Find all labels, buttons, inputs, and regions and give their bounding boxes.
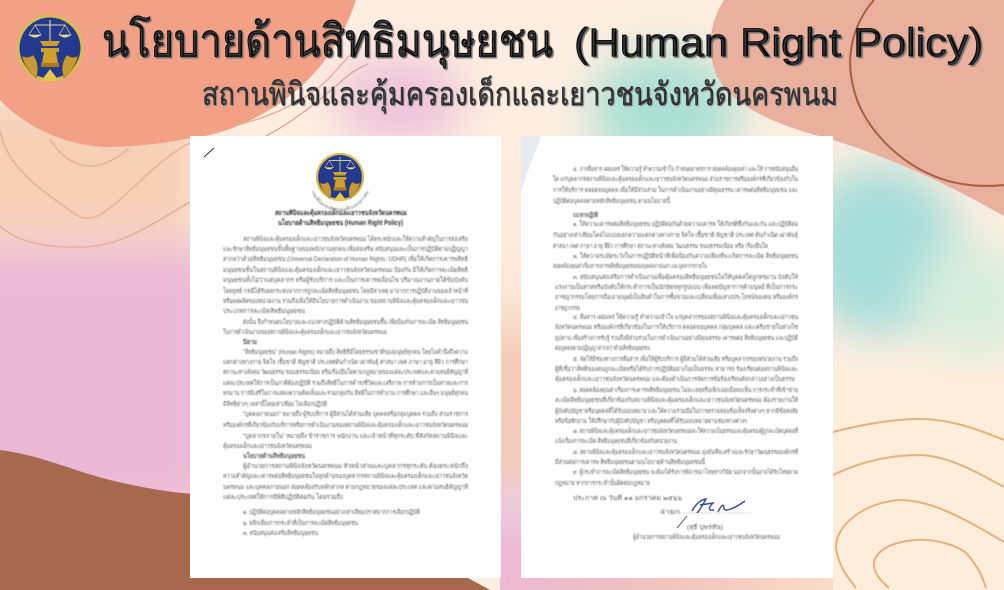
document body text: แต่ละประเทศให้การมีพิธีปฏิบัติต่อกัน โดยรวมถึง: [223, 493, 343, 501]
document body text: (สุธี บุพรหัน): [687, 523, 723, 531]
document body text: แต่ละประเทศให้การเป็นภาคีต้องปฏิบัติ รวมถึงสิทธิในการดำรงชีวิตและเสรีภาพ การห้ามการเป็นทาสและการ: [223, 378, 468, 387]
document body text: ดังนั้น จึงกำหนดนโยบายและแนวทางปฏิบัติด้านสิทธิมนุษยชนขึ้น เพื่อป้องกันการละเมิด สิทธิมนุษยชน: [243, 317, 469, 326]
document body text: ๕. จัดให้มีช่องทางการสื่อสาร เพื่อให้ผู้รับบริการ ผู้มีส่วนได้ส่วนเสีย หรือบุคลากรของหน่วยงาน รวมถึง: [573, 354, 798, 363]
document body text: ๑. ปฏิบัติต่อบุคคลตามหลักสิทธิมนุษยชนอย่างเท่าเทียมปราศจากการเลือกปฏิบัติ: [243, 508, 420, 516]
document body text: นครพนม และบุคคลภายนอก สอดคล้องกับหลักสากล ตามกฎหมายของแต่ละประเทศ และตามสนธิสัญญาที่: [223, 482, 468, 491]
document body text: ๗. สถานพินิจและคุ้มครองเด็กและเยาวชนจังหวัดนครพนมจะให้ความเป็นธรรมและคุ้มครองผู้ถูกละเมิดบุคคลที่: [573, 426, 798, 435]
document body text: หรือผลผลิตของหน่วยงาน รวมถึงเพื่อให้มีนโยบายการดำเนินงาน ของสถานพินิจและคุ้มครองเด็กและเยาวชน: [223, 296, 469, 305]
document body text: แตกต่างทางกาย จิตใจ เชื้อชาติ สัญชาติ ประเทศต้นกำเนิด เผ่าพันธุ์ ศาสนา เพศ ภาษา อายุ สีผิว การศึกษา: [223, 357, 468, 366]
document body text: อุปทาน เพื่อสร้างการรับรู้ รวมถึงมีส่วนร่วมในการดำเนินงานอย่างมีคุณธรรม เคารพต่อ สิทธิมนุษยชน และปฏิบัติ: [555, 333, 798, 342]
document emblem: [311, 152, 370, 212]
document body text: ใด แก่บุคลากรสถานพินิจและคุ้มครองเด็กและเยาวชนจังหวัดนครพนม ส่วนราชการหรือองค์กรที่เกี่ยวข้องกับใน: [553, 174, 799, 183]
document body text: กฎหมาย หากการกระทำนั้นผิดต่อกฎหมาย: [555, 478, 650, 487]
document body text: นิยาม: [243, 338, 257, 346]
subtitle: สถานพินิจและคุ้มครองเด็กและเยาวชนจังหวัดนครพนม: [202, 75, 838, 114]
emblem: Department of Juvenile Observation and Protection: [16, 14, 84, 82]
brown wave bottom left: [0, 450, 490, 590]
document heading: นโยบายด้านสิทธิมนุษยชน (Human Right Policy): [278, 218, 403, 227]
document body text: และรักษาสิทธิมนุษยชนขั้นพื้นฐานของพนักงานทุกคน เพื่อส่งเสริม สนับสนุนและเป็นการปฏิบัติตามปฏิญญา: [223, 244, 468, 253]
title: [102, 15, 983, 68]
document body text: การให้บริการ ตลอดจนบุคคล เพื่อให้มีส่วนร่วม ในการดำเนินงานอย่างมีคุณธรรม เคารพต่อสิทธิมนุษยชน และ: [553, 185, 798, 194]
document body text: คุ้มครองเด็กและเยาวชนจังหวัดนครพนม และต้องดำเนินการจัดการข้อร้องเรียนดังกล่าวอย่างเป็นธรรม: [555, 374, 795, 383]
document body text: [553, 164, 799, 541]
document body text: ต่อบุคคลตามปฏิญญาสากลว่าด้วยสิทธิมนุษยชน: [555, 344, 650, 352]
document heading: สถานพินิจและคุ้มครองเด็กและเยาวชนจังหวัดนครพนม: [275, 208, 407, 217]
document body text: สอดคล้องคุณค่าเรื่องการเคารพสิทธิมนุษยชนของบุคคลภายนอก และบุคลากรภายใน: [553, 261, 707, 270]
document body text: กันอย่างเท่าเทียมโดยไม่แบ่งแยกความแตกต่างทางกาย จิตใจ เชื้อชาติ สัญชาติ ประเทศ ต้นกำเนิด เผ่าพันธุ์: [553, 230, 798, 239]
document body text: อาชญากรรม: [555, 305, 580, 312]
document body text: หรือข้อซักถาม ให้ปรึกษากับผู้บังคับบัญชา หรือบุคคลที่ได้รับมอบหมายผ่านช่องทางต่างๆ: [555, 416, 747, 425]
document body text: ๙. ผู้กระทำการละเมิดสิทธิมนุษยชน จะต้องได้รับการพิจารณาโทษทางวินัย นอกจากนั้นอาจได้รับโทษตาม: [573, 467, 798, 476]
panel: policy document page 2: [521, 136, 833, 578]
document body text: หรือองค์กรที่เกี่ยวข้องกับบริการหรือการดำเนินงานของสถานพินิจและคุ้มครองเด็กและเยาวชนจังหวัดนครพนม: [223, 420, 468, 429]
document body text: แนวทางปฏิบัติ: [573, 211, 598, 219]
document body text: ๑. ให้ความเคารพต่อสิทธิมนุษยชน ปฏิบัติต่อกันด้วยความเคารพ ให้เกียรติซึ่งกันและกัน และปฏิบัติต่อ: [573, 219, 798, 228]
document body text: คุ้มครองเด็กและเยาวชนจังหวัดนครพนม: [223, 441, 312, 450]
document body text: ปฏิบัติต่อบุคคลตามหลักสิทธิมนุษยชน ตามนโยบายนี้: [553, 196, 671, 205]
document body text: จ่ายก: [660, 509, 680, 516]
document body text: [223, 234, 469, 537]
document body text: ผู้ที่เชื่อว่าสิทธิของตนถูกละเมิดหรือได้รับการปฏิบัติอย่างไม่เป็นธรรม สามารถ ร้องเรียนต่อสถานพินิจและ: [555, 364, 798, 373]
document body text: ความสำคัญและเคารพต่อสิทธิมนุษยชนในทุกด้านของบุคลากรสถานพินิจและคุ้มครองเด็กและเยาวชนจังหวัด: [223, 471, 468, 480]
document body text: ศาสนา เพศ ภาษา อายุ สีผิว การศึกษา สถานะทางสังคม วัฒนธรรม ขนบธรรมเนียม หรือ เรื่องอื่นใด: [553, 241, 768, 250]
document body text: ผู้อำนวยการสถานพินิจจังหวัดนครพนม หัวหน้าส่วนและบุคลากรทุกระดับ ต้องตระหนักถึง: [243, 462, 468, 470]
salmon blob top right: [710, 0, 1004, 216]
document body text: สถานพินิจและคุ้มครองเด็กและเยาวชนจังหวัดนครพนม ได้ตระหนักและให้ความสำคัญในการส่งเสริม: [243, 234, 468, 243]
document body text: ๔. การสื่อสาร เผยแพร่ ให้ความรู้ ทำความเข้าใจ กำหนดมาตรการ สอดคล้องคุณค่า และให้ การสนับสนุนอื่น: [573, 164, 798, 173]
panel: policy document page 1: [190, 136, 501, 578]
document body text: ๓. สนับสนุนส่งเสริมสิทธิมนุษยชน: [243, 529, 319, 537]
document body text: ประเภทการละเมิดสิทธิมนุษยชน: [223, 307, 306, 315]
document body text: ๖. สอดคล้องคุณค่าเรื่องการเคารพสิทธิมนุษยชน ไม่ละเลยหรือเพิกเฉยเมื่อพบเห็น การกระทำที่เข้าข่าย: [573, 385, 798, 394]
signature: [677, 499, 752, 528]
brown arc top right: [850, 0, 1004, 186]
document body text: มีสิทธิต่างๆ เหล่านี้โดยเท่าเทียม ไม่เลือกปฏิบัติ: [223, 399, 327, 408]
document body text: ๔. สื่อสาร เผยแพร่ ให้ความรู้ ทำความเข้าใจ แก่บุคลากรของสถานพินิจและคุ้มครองเด็กและเยาวชน: [573, 312, 799, 321]
document body text: "สิทธิมนุษยชน" (Human Rights) หมายถึง สิทธิที่มีโดยธรรมชาติของมนุษย์ทุกคน โดยไม่คำนึงถึงความ: [243, 347, 468, 356]
document body text: "บุคคลภายนอก" หมายถึง ผู้รับบริการ ผู้มีส่วนได้ส่วนเสีย บุคคลหรือกลุ่มบุคคล รวมถึง ส่วนราชการ: [243, 410, 468, 418]
document body text: มีส่วนต่อการเคารพ สิทธิมนุษยชนตามนโยบายด้านสิทธิมนุษยชนนี้: [555, 457, 706, 466]
document body text: สถานะทางสังคม วัฒนธรรม ขนบธรรมเนียม หรือเรื่องอื่นใดตามกฎหมายของแต่ละประเทศและตามสนธิสัญญาที่: [223, 367, 468, 376]
document body text: นโยบายด้านสิทธิมนุษยชน: [243, 451, 306, 460]
document heading: [275, 208, 407, 227]
document body text: แจ้งเรื่องการละเมิด สิทธิมนุษยชนที่เกี่ยวข้องกับหน่วยงาน: [555, 436, 677, 445]
document body text: ๒. หลีกเลี่ยงการกระทำที่เป็นการละเมิดสิทธิมนุษยชน: [243, 518, 358, 527]
document emblem: กรมพินิจและคุ้มครองเด็กและเยาวชน: [311, 190, 370, 212]
document body text: มนุษยชนขั้นในสถานพินิจและคุ้มครองเด็กและเยาวชนจังหวัดนครพนม ป้องกัน มิให้เกิดการละเมิดสิทธิ: [223, 265, 468, 274]
document body text: ทรมาน การมีเสรีในการแสดงความคิดเห็นและรวมกลุ่มกัน สิทธิในการทำงาน การศึกษา และอื่นๆ มนุษย์ทุกคน: [223, 388, 469, 397]
document body text: "บุคลากรภายใน" หมายถึง ข้าราชการ พนักงาน และเจ้าหน้าที่ทุกระดับ ที่สังกัดสถานพินิจและ: [243, 431, 468, 440]
salmon blob top left: [0, 0, 356, 147]
document body text: จังหวัดนครพนม หรือองค์กรที่เกี่ยวข้องในการให้บริการ ตลอดจนบุคคล กลุ่มบุคคล และเครือข่ายในห่วงโซ่: [555, 322, 799, 331]
document body text: ประกาศ ณ วันที่ ๑๑ มกราคม ๒๕๖๖: [573, 493, 682, 502]
document body text: ละเมิดสิทธิมนุษยชนที่เกี่ยวข้องกับสถานพินิจและคุ้มครองเด็กและเยาวชนจังหวัดนครพนม ต้องรายงานให้: [555, 395, 798, 404]
document body text: แรงงานเป็นทาสหรือบังคับให้กระทำการเป็นนักษัตรทุกรูปแบบ เพื่อลดปัญหาการค้ามนุษย์ ที่เป็นการกระ: [555, 282, 798, 291]
title: นโยบายด้านสิทธิมนุษยชน: [102, 15, 553, 68]
document body text: ๘. สถานพินิจและคุ้มครองเด็กและเยาวชนจังหวัดนครพนม มุ่งมั่นที่จะสร้างและรักษาวัฒนธรรมองค์กรที่: [573, 447, 798, 456]
document body text: ในการดำเนินงานของสถานพินิจและคุ้มครองเด็กและเยาวชนจังหวัดนครพนม: [223, 327, 387, 336]
check mark: [204, 148, 214, 157]
document body text: ผู้บังคับบัญชาหรือบุคคลที่ได้รับมอบหมาย และให้ความร่วมมือในการตรวจสอบข้อเท็จจริงต่างๆ หากมีข้อสงสัย: [555, 406, 798, 415]
document body text: สากลว่าด้วยสิทธิมนุษยชน (Universal Declaration of Human Rights: UDHR) เพื่อให้เกิดการเคารพสิทธิ: [223, 254, 468, 263]
document body text: มนุษยชนทั้งไม่ว่าแต่บุคลากร หรือผู้รับบริการ และเป็นการเคารพเงื่อนไข ปริมาณงานภายใต้ข้อบังคับ: [223, 275, 468, 284]
document body text: ๓. สนับสนุนส่งเสริมการดำเนินงานเพื่อคุ้มครองสิทธิมนุษยชนไม่ให้บุคคลใดถูกทรมาน บังคับให้: [573, 272, 798, 281]
document body text: ๒. ให้ความระมัดระวังในการปฏิบัติหน้าที่เพื่อป้องกันความเสี่ยงที่จะเกิดการละเมิด สิทธิมนุษยชน: [573, 251, 799, 260]
title: (Human Right Policy): [574, 21, 983, 65]
document body text: โดยยุทธ์ กรณีได้รับผลกระทบจากการถูกละเมิดสิทธิมนุษยชน โดยมีสาเหตุ มาจากการปฏิบัติงานของเจ้าหน้าที่: [223, 286, 468, 295]
document body text: ผู้อำนวยการสถานพินิจและคุ้มครองเด็กและเยาวชนจังหวัดนครพนม: [633, 532, 780, 541]
document body text: อาชญากรรมโดยการถือเอามนุษย์เป็นสินค้าในการซื้อขายและเปลี่ยนเพื่อแสวงประโยชน์ของตน หรือองค์กร: [555, 292, 798, 301]
